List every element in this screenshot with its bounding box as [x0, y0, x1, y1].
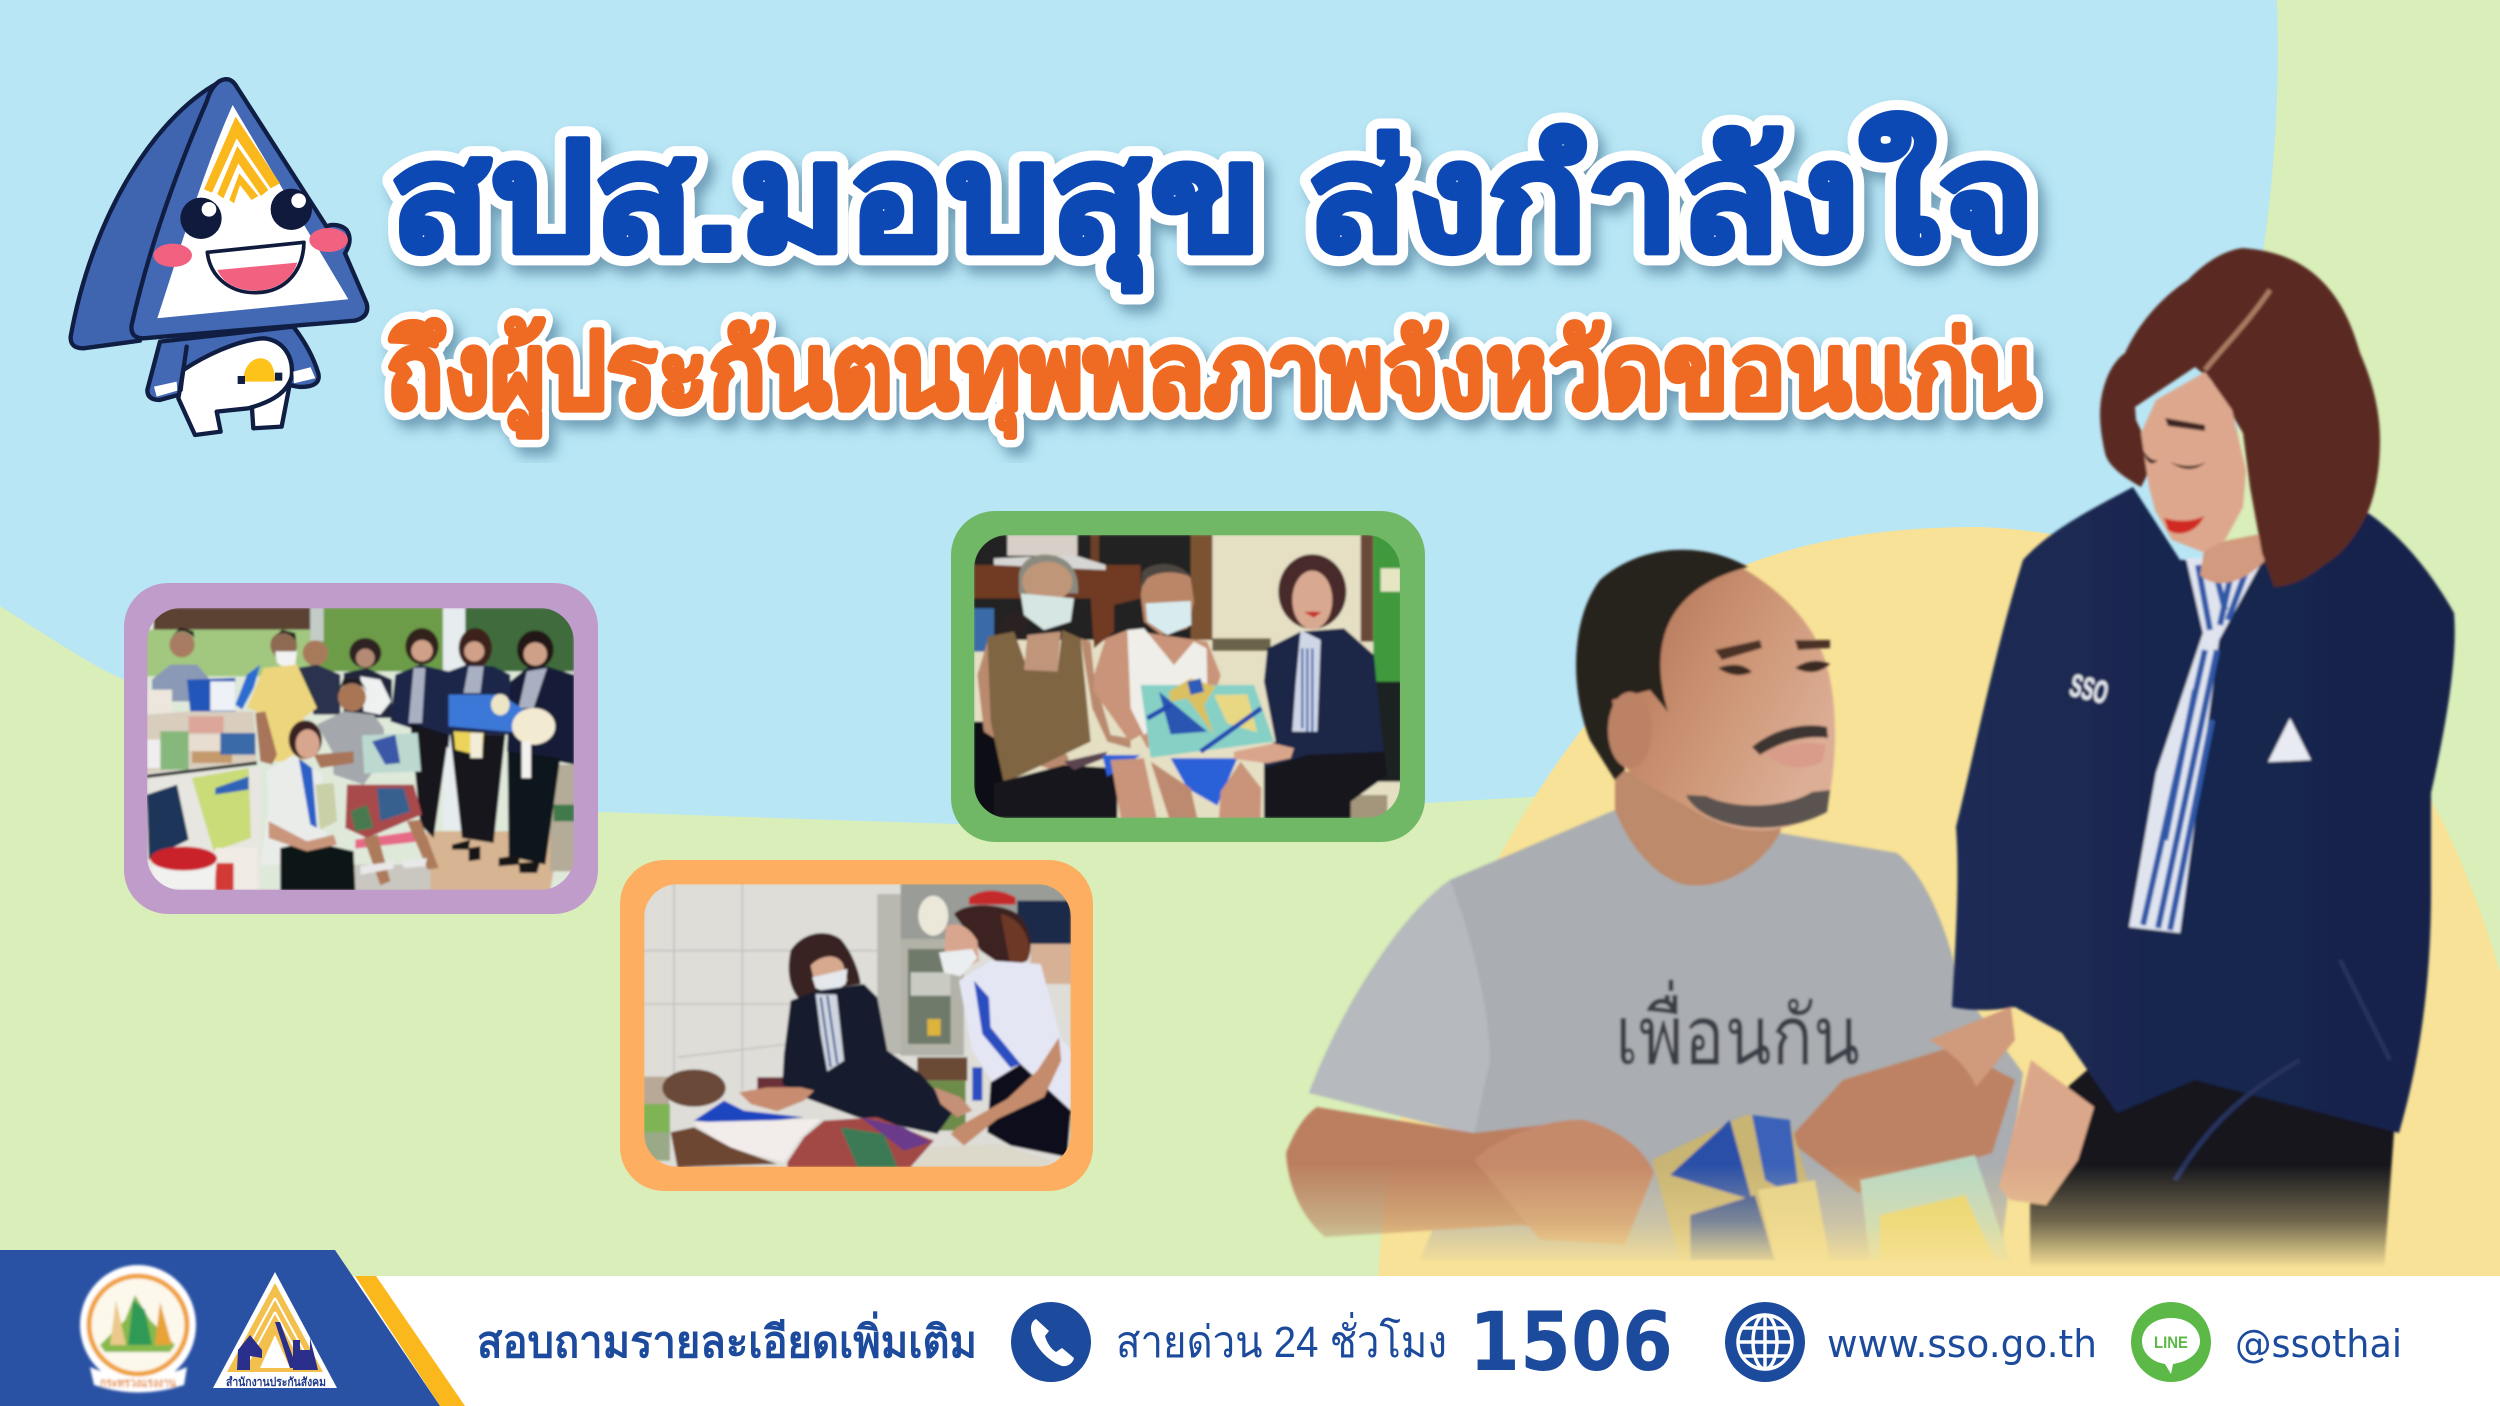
footer blue tab — [0, 1250, 440, 1406]
footer bar — [0, 1276, 2500, 1406]
photo: group with goods — [147, 608, 574, 890]
nurse — [260, 720, 355, 890]
old woman — [974, 555, 1131, 818]
man: mustache and mouth — [1752, 725, 1828, 755]
footer yellow stripe — [355, 1276, 465, 1406]
text: ask for more details: สอบถามรายละเอียดเพิ่มเติม — [477, 1311, 977, 1367]
jacket logo — [2268, 718, 2311, 762]
gift ribbon and card — [1652, 1115, 2010, 1260]
man: hair — [1576, 550, 1748, 780]
man: right arm — [1788, 1047, 2015, 1193]
man — [1094, 564, 1261, 818]
mascot body — [147, 327, 319, 435]
background: light blue shape — [0, 0, 2278, 826]
officer: lips — [2164, 516, 2204, 534]
title line 1: สปส.มอบสุข ส่งกำลังใจ — [390, 113, 2035, 292]
officer: hand one — [1929, 1007, 2015, 1087]
officer — [1234, 554, 1387, 818]
background: yellow circle — [1378, 527, 2500, 1290]
mascot — [71, 79, 367, 435]
man: left hand — [1474, 1120, 1654, 1245]
mascot chevrons — [204, 117, 280, 203]
logo: social security office: สำนักงานประกันสังคม — [226, 1375, 326, 1389]
mascot cheeks — [153, 228, 348, 267]
icon: line: LINE — [2154, 1333, 2188, 1352]
officer: eyes and brow — [2143, 418, 2206, 469]
officer — [782, 933, 954, 1134]
officers — [390, 628, 574, 873]
SSO letters: SSO — [2066, 667, 2112, 711]
title line 2: ถึงผู้ประกันตนทุพพลภาพจังหวัดขอนแก่น — [386, 313, 2035, 438]
photo frame: purple — [124, 583, 598, 914]
officer: trousers — [2028, 1068, 2396, 1266]
man: head — [1600, 552, 1835, 830]
text: hotline: สายด่วน 24 ชั่วโมง — [1116, 1311, 1447, 1367]
man: left sleeve shade — [1309, 880, 1490, 1135]
emblem: ministry of labour — [80, 1265, 196, 1392]
photo frame: green — [951, 511, 1425, 842]
man in grey shirt — [1286, 550, 2023, 1260]
main photo: man and officer — [1286, 248, 2455, 1270]
goods on shelf — [147, 665, 260, 890]
officer: neck — [2198, 534, 2266, 586]
officer: jacket — [1952, 487, 2455, 1133]
officer: striped shirt — [2129, 558, 2264, 933]
officer: hand two — [1999, 1060, 2094, 1205]
man: left arm — [1284, 1106, 1540, 1238]
icon: phone — [1011, 1302, 1091, 1382]
icon: globe — [1725, 1302, 1805, 1382]
yellow-shirt man — [247, 630, 317, 765]
title line 1: สปส.มอบสุข ส่งกำลังใจ — [390, 113, 2035, 292]
mascot mouth — [207, 242, 304, 293]
officer — [1788, 248, 2455, 1270]
officer: face — [2141, 372, 2246, 552]
man: shirt — [1422, 809, 2024, 1259]
shirt lettering: เพื่อนกัน — [1615, 979, 1860, 1082]
logo: social security office — [213, 1272, 337, 1389]
man: ear — [1608, 692, 1652, 768]
mascot head — [71, 79, 225, 348]
text: website: www.sso.go.th — [1827, 1322, 2097, 1366]
photo frame: orange — [620, 860, 1093, 1191]
number: 1506: 1506 — [1469, 1296, 1673, 1390]
photo: bedside visit — [644, 884, 1071, 1167]
title line 2: ถึงผู้ประกันตนทุพพลภาพจังหวัดขอนแก่น — [386, 313, 2035, 438]
officer: sleeve fold — [2175, 960, 2390, 1180]
man: neck — [1615, 770, 1790, 886]
gift box — [1141, 678, 1274, 758]
man: beard — [1686, 790, 1830, 828]
emblem: ministry of labour: กระทรวงแรงงาน — [100, 1375, 176, 1390]
patient — [644, 1069, 1052, 1167]
mascot face — [157, 105, 348, 318]
photo: home visit with gift box — [974, 535, 1401, 818]
back-row people — [152, 627, 392, 718]
icon: line — [2131, 1302, 2211, 1382]
seated man — [314, 678, 439, 885]
officer: hair — [2100, 248, 2380, 587]
text: line handle: @ssothai — [2235, 1322, 2402, 1366]
man: brows and eyes — [1715, 640, 1830, 660]
mascot eyes — [180, 189, 312, 239]
nurse — [934, 905, 1071, 1157]
blue sign and mascot sign — [449, 694, 555, 778]
footer — [0, 1250, 2500, 1406]
